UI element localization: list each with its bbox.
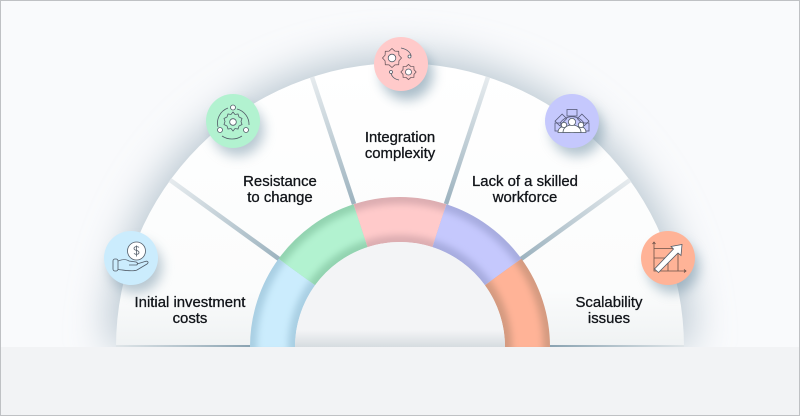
icon: change cycle gear bbox=[206, 94, 264, 156]
label: scalability issues: Scalability bbox=[575, 295, 643, 311]
label: integration complexity: Integration bbox=[365, 130, 435, 146]
label: initial investment costs: costs bbox=[173, 311, 207, 327]
big semicircle shadow bbox=[108, 55, 692, 347]
icon: workforce and gear bbox=[545, 94, 603, 156]
label: resistance to change: to change bbox=[247, 190, 313, 206]
big semicircle panel bbox=[116, 63, 684, 347]
divider: integration and workforce bbox=[446, 77, 488, 204]
icon: scaling chart bbox=[641, 231, 699, 293]
label: initial investment costs: Initial investment bbox=[135, 295, 245, 311]
label: integration complexity: complexity bbox=[365, 146, 436, 162]
floor bbox=[0, 347, 800, 416]
inner semicircle bbox=[295, 242, 505, 347]
divider: workforce and scalability bbox=[521, 180, 630, 259]
divider: cost and resistance bbox=[170, 180, 279, 259]
base line: left bbox=[116, 345, 250, 347]
base line: right bbox=[550, 345, 684, 347]
label: resistance to change: Resistance bbox=[243, 174, 317, 190]
ring segment: green bbox=[278, 204, 368, 285]
label: lack of a skilled workforce: workforce bbox=[492, 190, 557, 206]
label: lack of a skilled workforce: Lack of a skilled bbox=[472, 174, 578, 190]
ring segment: blue bbox=[250, 259, 315, 347]
icon: hand holding coin bbox=[104, 231, 162, 293]
icon: integration gears bbox=[374, 37, 433, 100]
ring segment: purple bbox=[432, 204, 522, 285]
divider: resistance and integration bbox=[312, 77, 354, 204]
ring segment: orange bbox=[485, 258, 550, 347]
label: scalability issues: issues bbox=[588, 311, 630, 327]
ring segment: pink bbox=[354, 197, 446, 247]
